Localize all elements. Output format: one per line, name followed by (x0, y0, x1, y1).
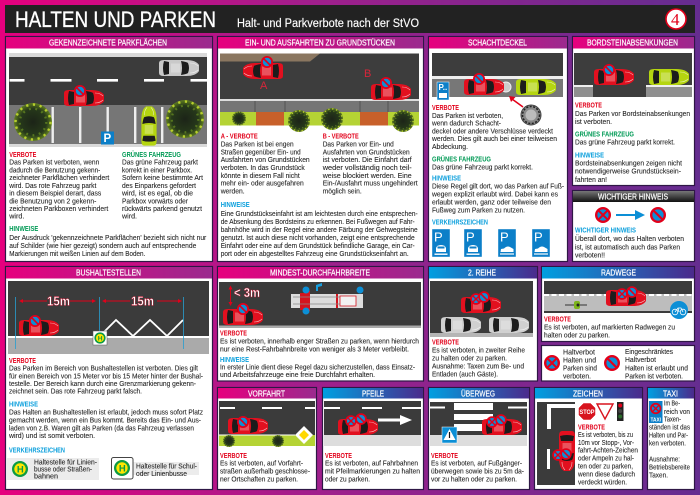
traffic signs legend: Haltestelle für Schul- (136, 462, 197, 470)
illustration: driveways: A (260, 80, 268, 92)
legend: eingeschränktes Haltverbot: Eingeschränktes (625, 347, 673, 356)
heading: BORDSTEINABSENKUNGEN (587, 38, 678, 48)
text block: In erster Linie dient diese Regel dazu sicherzustellen, dass Einsatz- (220, 362, 415, 372)
text block: ständen ist das (649, 423, 690, 432)
title bar (5, 5, 695, 33)
text block: VERBOTE (220, 451, 247, 460)
heading: EIN- UND AUSFAHRTEN ZU GRUNDSTÜCKEN (245, 38, 395, 48)
icon: taxi stand sign: TAXI (650, 418, 661, 424)
text: grünes Fahrzeug: des Einparkens gefordert (122, 181, 197, 190)
legend: eingeschränktes Haltverbot: Parken ist verboten. (625, 372, 683, 380)
text: grünes Fahrzeug (432, 154, 533, 172)
text block: VERBOTE (431, 451, 458, 460)
text block: reich von (664, 407, 690, 416)
text block: Ausnahme: Taxen zum Be- und (432, 362, 524, 370)
text block: Ausnahme: (649, 454, 680, 464)
text block: ist, ist automatisch auch das Parken (575, 242, 680, 252)
traffic signs legend: oder Linienbusse (136, 469, 187, 478)
text: B - Verbote: Ein-/Ausfahrt muss ungehindert (323, 178, 418, 188)
text block: GRÜNES FAHRZEUG (575, 130, 634, 138)
icons: no stopping equals no parking (595, 207, 666, 223)
text: A - Verbote: werden. (220, 186, 245, 196)
panel: Radwege (542, 266, 694, 342)
text block: vor zu halten oder zu parken. (431, 474, 517, 484)
text: Verbote: zeichneten Parkboxen verhindert (9, 204, 109, 213)
text: A - Verbote: verboten. In das Grundstück (221, 163, 305, 172)
text: grünes Fahrzeug (121, 150, 204, 220)
panel: sign legend (542, 346, 694, 381)
illustration: manhole (432, 53, 563, 125)
text block: ten oder zu parken, (578, 462, 633, 470)
text block: Es ist verboten, in zweiter Reihe (432, 346, 525, 354)
panel: Ein- und Ausfahrten zu Grundstücken (218, 36, 424, 262)
text: grünes Fahrzeug: wird, ist es egal, ob die (121, 188, 193, 198)
panel: Taxi (648, 388, 694, 490)
text block (220, 451, 310, 484)
text: Verbote: die Benutzung von 2 gekenn- (9, 196, 97, 205)
text: Verbote (8, 150, 110, 220)
text: Hinweise: HINWEISE (432, 174, 461, 182)
panel: Überweg (428, 388, 530, 490)
text: Verbote: in diesem Beispiel derart, dass (9, 188, 101, 198)
panel: Schachtdeckel (428, 36, 568, 262)
illustration: zebra crossing (430, 402, 527, 446)
text block: Taxen- (664, 415, 681, 424)
text: B - Verbote: Das Parken vor Ein- und (323, 140, 394, 148)
legend: Haltverbot: Haltverbot (563, 348, 596, 356)
traffic signs legend: busse oder Straßen- (34, 464, 92, 474)
text: Verbote: für einen Bereich von 15 Meter vor bis 15 Meter hinter der Bushal- (9, 372, 203, 380)
text: A - Verbote: Ausfahrten von Grundstücken (221, 155, 310, 164)
text: Verbote (9, 356, 203, 396)
illustration: arrow markings (324, 401, 421, 446)
text: Hinweise: Diese Regel gilt dort, wo das Parken auf Fuß- (432, 182, 564, 190)
text block (220, 328, 419, 379)
text: grünes Fahrzeug: Parkbox vorwärts oder (122, 196, 188, 205)
text block: Im Be- (664, 398, 680, 408)
illustration: junction with car (537, 402, 575, 485)
text block: mit Pfeilmarkierungen zu halten (325, 467, 420, 476)
panel: gekennzeichnete Parkflächen (6, 36, 212, 262)
text: Verbote: VERBOTE (432, 103, 459, 112)
illustration: manhole: P.. (438, 83, 447, 92)
page number badge (666, 9, 686, 29)
panel: Pfeile (322, 388, 424, 490)
text block: Es ist verboten, innerhalb enger Straßen zu parken, wenn hierdurch (220, 337, 419, 346)
text: Verbote: wenn dadurch Schacht- (431, 118, 501, 128)
traffic signs legend (7, 446, 199, 480)
text: Hinweise: gemacht werden, wenn ein Bus kommt. Bereits das Ein- und Aus- (9, 416, 201, 424)
legend: Haltverbot: Parken sind (563, 364, 597, 372)
text: grünes Fahrzeug: Das grüne Fahrzeug parkt (122, 158, 199, 166)
illustration: bus stop zone (8, 281, 209, 354)
text block (577, 422, 638, 486)
text block: Es ist verboten, auf Vorfahrt- (220, 459, 303, 468)
text block: 10m vor Stopp-, Vor- (578, 438, 634, 447)
text block: halten oder zu parken. (544, 330, 610, 340)
text block: Taxen. (649, 470, 668, 480)
text block (431, 451, 524, 484)
text: Verbote (431, 103, 557, 151)
text: B - Verbote: möglich sein. (323, 186, 362, 196)
text: Hinweise (431, 174, 564, 214)
text: B - Verbote: weder vollständig noch teil- (322, 163, 412, 172)
text: Hinweise (9, 224, 207, 258)
text block: VERBOTE (325, 451, 352, 460)
illustration: parking bays: P (104, 133, 112, 145)
heading: MINDEST-DURCHFAHRBREITE (270, 268, 370, 278)
text: Hinweise (221, 200, 418, 258)
text: Verbote: Abdeckung. (432, 142, 468, 151)
panel: 2. Reihe (428, 266, 538, 381)
text block (575, 226, 684, 260)
text block: VERBOTE (578, 422, 605, 432)
text: grünes Fahrzeug: GRÜNES FAHRZEUG (122, 150, 181, 159)
text block: notwendigerweise Grundstücksein- (575, 166, 681, 176)
text: Verbote: VERBOTE (9, 356, 36, 365)
panel: wichtiger Hinweis (572, 190, 694, 262)
legend: eingeschränktes Haltverbot: Halten ist erlaubt und (625, 364, 688, 372)
text block: Es ist verboten, auf Fußgänger- (431, 459, 522, 468)
panel: Mindest-Durchfahrbreite (218, 266, 424, 381)
text block: oder Ampeln zu hal- (578, 454, 634, 462)
text: B - Verbote (322, 132, 418, 196)
heading: SCHACHTDECKEL (468, 38, 527, 48)
traffic signs legend: VERKEHRSZEICHEN (9, 446, 65, 454)
text: B - Verbote: weise blockiert werden. Eine (322, 171, 412, 180)
traffic signs: VERKEHRSZEICHEN (432, 218, 488, 226)
illustration: driveways (220, 54, 419, 132)
text: Hinweise: genutzt. Ist auch diese nicht vorhanden, zeigt eine entsprechende (221, 233, 415, 242)
heading: BUSHALTESTELLEN (76, 268, 141, 278)
text: B - Verbote: B - VERBOTE (323, 132, 359, 140)
text: Hinweise: HINWEISE (9, 400, 38, 408)
text: Verbote: Das Parken im Bereich von Bushaltestellen ist verboten. Dies gilt (9, 364, 199, 373)
text block (649, 398, 690, 480)
text: Verbote: zeichneter Parkflächen verhindert (9, 173, 110, 182)
heading: ÜBERWEG (461, 388, 495, 398)
illustration: bus stop zone: 15m (47, 294, 70, 308)
text: Hinweise: wegen explizit erlaubt wird. Dabei kann es (431, 190, 558, 198)
text block: ken verboten. (649, 439, 686, 448)
subtitle: Halt- und Parkverbote nach der StVO (237, 18, 419, 30)
text: Verbote: deckel oder andere Verschlüsse verdeckt (432, 126, 554, 136)
heading: WICHTIGER HINWEIS (598, 192, 668, 202)
text: Hinweise: Das Halten an Bushaltestellen ist erlaubt, jedoch muss sofort Platz (9, 408, 203, 417)
heading: 2. REIHE (468, 268, 496, 278)
text: Hinweise: Fußweg zum Parken zu nutzen. (432, 206, 525, 214)
text block: Überall dort, wo das Halten verboten (575, 234, 684, 243)
heading: ZEICHEN (573, 388, 603, 398)
legend: Haltverbot: verboten. (563, 372, 591, 380)
text block: Es ist verboten, bis zu (578, 430, 633, 439)
text block (575, 100, 690, 184)
text: grünes Fahrzeug: wird. (121, 212, 137, 220)
text: Verbote: wird. (8, 212, 24, 220)
text: Hinweise: HINWEISE (221, 200, 250, 209)
text: A - Verbote: Straßen gegenüber Ein- und (221, 147, 301, 156)
text block: WICHTIGER HINWEIS (575, 226, 636, 234)
legend: eingeschränktes Haltverbot: Haltverbot (625, 355, 657, 364)
text: B - Verbote: ist verboten. Die Einfahrt darf (323, 155, 412, 164)
text block: zu halten oder zu parken. (432, 354, 507, 362)
heading: GEKENNZEICHNETE PARKFLÄCHEN (49, 38, 167, 48)
text block: VERBOTE (432, 338, 459, 346)
text: Hinweise: Der Ausdruck 'gekennzeichnete Parkflächen' bezieht sich nicht nur (9, 233, 207, 242)
text block: ner Ortschaften zu parken. (220, 474, 298, 484)
text: grünes Fahrzeug: Das grüne Fahrzeug parkt korrekt. (432, 162, 533, 172)
illustration: fire engine and narrow road (219, 282, 421, 328)
illustration: priority road (219, 401, 315, 447)
legend: Haltverbot: Halten und (563, 356, 596, 364)
panel: Vorfahrt (218, 388, 316, 490)
heading: VORFAHRT (248, 388, 285, 398)
panel: Bushaltestellen (6, 266, 212, 490)
text: Hinweise: auf Schilder (wie hier gezeigt) sondern auch auf entsprechende (9, 241, 196, 250)
text block: VERBOTE (544, 314, 571, 324)
text: A - Verbote: mehr ein- oder ausgefahren (221, 178, 304, 188)
text block (544, 314, 675, 340)
heading: TAXI (663, 388, 678, 398)
text block (432, 338, 525, 378)
text block: straßen außerhalb geschlosse- (220, 467, 310, 476)
text: Hinweise: Markierungen mit weißen Linien auf dem Boden. (9, 249, 145, 258)
text block: und Arbeitsfahrzeuge eine freie Durchfahrt erhalten. (220, 370, 375, 379)
text: Verbote: werden. Dies gilt auch bei einer teilweisen (431, 134, 557, 143)
text: grünes Fahrzeug: rückwärts parkend genutzt (122, 204, 203, 213)
text block: VERBOTE (220, 328, 247, 338)
text: A - Verbote: könnte in diesem Fall nicht (221, 171, 300, 180)
text block: fahrt-Achten-Zeichen (578, 446, 638, 454)
text: Verbote: wird. Das rote Fahrzeug parkt (8, 181, 97, 190)
text block: VERBOTE (575, 100, 602, 110)
panel: Zeichen (534, 388, 642, 490)
text: Hinweise (8, 400, 203, 440)
text: grünes Fahrzeug: korrekt in einer Parkbox. (122, 165, 192, 174)
text block: verdeckt würden. (578, 478, 627, 486)
text: Hinweise: erlaubt werden, ganz oder teilweise den (432, 198, 551, 206)
text: Verbote: dadurch die Benutzung gekenn- (9, 165, 101, 174)
text block: wenn diese dadurch (577, 470, 635, 478)
text: Verbote: Das Parken ist verboten, (432, 111, 503, 120)
text block: verboten!! (575, 250, 605, 260)
page number badge: 4 (671, 10, 680, 29)
text: A - Verbote: Das Parken ist bei engen (221, 140, 294, 148)
text: Verbote: zeichnet sein. Das rote Fahrzeug parkt falsch. (9, 387, 142, 396)
text block: Es ist verboten, auf Fahrbahnen (325, 459, 418, 468)
panel: Bordsteinabsenkungen (572, 36, 694, 186)
illustration: lowered kerb (574, 53, 692, 97)
text: A - Verbote (220, 132, 310, 196)
text block: fahrten an! (575, 175, 607, 184)
illustration: fire engine and narrow road: < 3m (234, 286, 260, 300)
heading: PFEILE (362, 388, 384, 398)
text block: Es ist verboten, auf markierten Radwegen zu (544, 322, 675, 332)
illustration: double parking (430, 281, 533, 337)
heading: RADWEGE (601, 268, 636, 278)
text: grünes Fahrzeug: GRÜNES FAHRZEUG (432, 154, 491, 164)
text block: Entladen (auch Gäste). (432, 370, 498, 378)
text: Hinweise: wird) und ist somit verboten. (8, 431, 95, 440)
text block: HINWEISE (220, 355, 249, 364)
text block (325, 451, 420, 484)
title: HALTEN UND PARKEN (15, 7, 216, 32)
text block: ist verboten. (575, 117, 612, 126)
traffic signs (432, 218, 550, 257)
legend: Haltverbot (544, 348, 597, 380)
text block: überwegen sowie bis zu 5m da- (431, 467, 524, 476)
text: Hinweise: bahnhöhe wird in der Regel eine andere Färbung der Gehwegsteine (221, 225, 418, 234)
text: B - Verbote: Ausfahrten von Grundstücken (323, 147, 410, 156)
legend: eingeschränktes Haltverbot (604, 347, 688, 380)
text: grünes Fahrzeug: Sofern keine bestimmte Art (122, 173, 204, 182)
text: Hinweise: Eine Grundstückseinfahrt ist am leichtesten durch eine entsprechen- (221, 209, 418, 218)
text block: nur eine Rest-Fahrbahnbreite von weniger als 3 Meter verbleibt. (220, 344, 409, 354)
text block: Bordsteinabsenkungen zeigen nicht (575, 158, 683, 168)
text block: Betriebsbereite (649, 462, 690, 472)
illustration: cycle lane (544, 281, 692, 319)
text: Hinweise: HINWEISE (9, 224, 38, 233)
text: Verbote: Das Parken ist verboten, wenn (9, 158, 99, 166)
icons: stop, yield, traffic light: STOP (580, 409, 595, 416)
illustration: parking bays (9, 53, 207, 147)
text block: Das grüne Fahrzeug parkt korrekt. (575, 138, 675, 146)
text: Hinweise: laden von z.B. Waren gilt als Parken (da das Fahrzeug verlassen (9, 423, 194, 432)
traffic signs legend: bahnen (34, 472, 58, 480)
text: Hinweise: port oder ein abgestelltes Fahrzeug eine Grundstückseinfahrt an. (221, 249, 409, 258)
text: A - Verbote: A - VERBOTE (221, 132, 258, 140)
illustration: bus stop zone: 15m (131, 294, 154, 308)
text: Hinweise: de Absenkung des Bordsteins zu erkennen. Bei Fußwegen auf Fahr- (221, 217, 415, 226)
traffic signs legend: Haltestelle für Linien- (34, 458, 97, 466)
text: Verbote: testelle. Der Bereich kann durch eine Grenzmarkierung gekenn- (9, 379, 196, 388)
illustration: driveways: B (364, 68, 371, 80)
text block: HINWEISE (575, 150, 604, 160)
text: Verbote: VERBOTE (9, 150, 36, 159)
text block: oder zu parken. (325, 474, 370, 484)
text: Hinweise: Einfahrt oder eine auf dem Grundstück befindliche Garage, ein Car- (221, 241, 415, 250)
